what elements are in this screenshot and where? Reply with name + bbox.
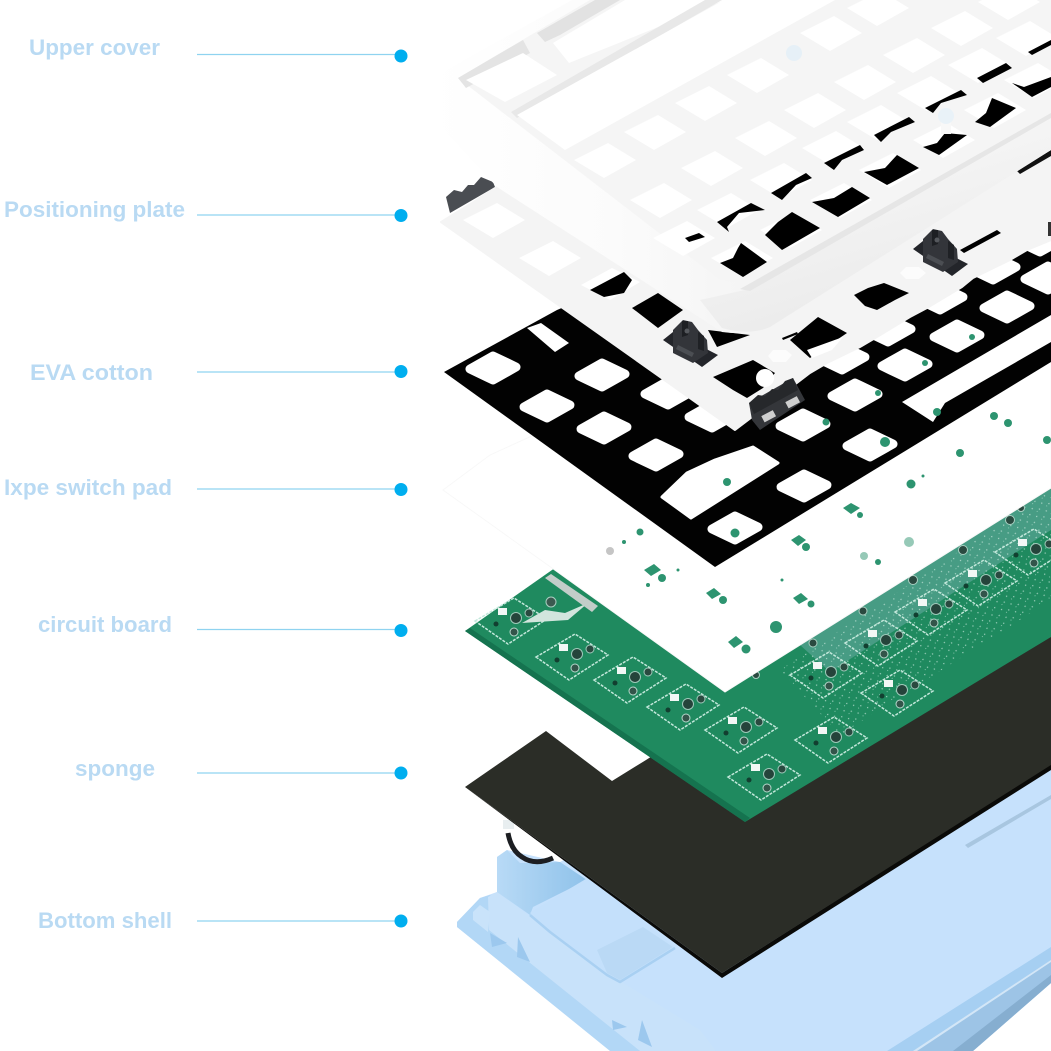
label: circuit board: circuit board <box>38 612 172 637</box>
label: Ixpe switch pad: Ixpe switch pad <box>4 475 172 500</box>
label: EVA cotton: EVA cotton <box>30 360 153 385</box>
panel: circuit board layer <box>465 250 1051 822</box>
panel: IXPE switch pad layer <box>443 200 1051 692</box>
panel: positioning plate layer <box>441 60 1051 430</box>
icon: battery wire <box>503 820 553 862</box>
panel: bottom shell <box>457 600 1051 1051</box>
panel: EVA cotton layer <box>444 100 1051 567</box>
label: Ixpe switch pad <box>4 475 408 500</box>
label: sponge: sponge <box>75 756 155 781</box>
icon: front-left switch clip <box>663 320 718 367</box>
icon: right switch clip <box>913 229 968 276</box>
label: Bottom shell: Bottom shell <box>38 908 172 933</box>
label: Bottom shell <box>38 908 408 933</box>
icon: front stabilizer clip <box>749 378 805 430</box>
label: EVA cotton <box>30 360 408 385</box>
panel: sponge layer <box>465 500 1051 978</box>
panel: upper cover <box>430 0 1051 333</box>
label: Positioning plate <box>4 197 408 222</box>
label: circuit board <box>38 612 408 637</box>
icon: rear stabilizer clip <box>446 177 495 213</box>
label: Positioning plate: Positioning plate <box>4 197 185 222</box>
label: Upper cover <box>29 35 408 62</box>
icon: far-right clip <box>1048 222 1051 236</box>
label: sponge <box>75 756 408 781</box>
label: Upper cover: Upper cover <box>29 35 160 60</box>
